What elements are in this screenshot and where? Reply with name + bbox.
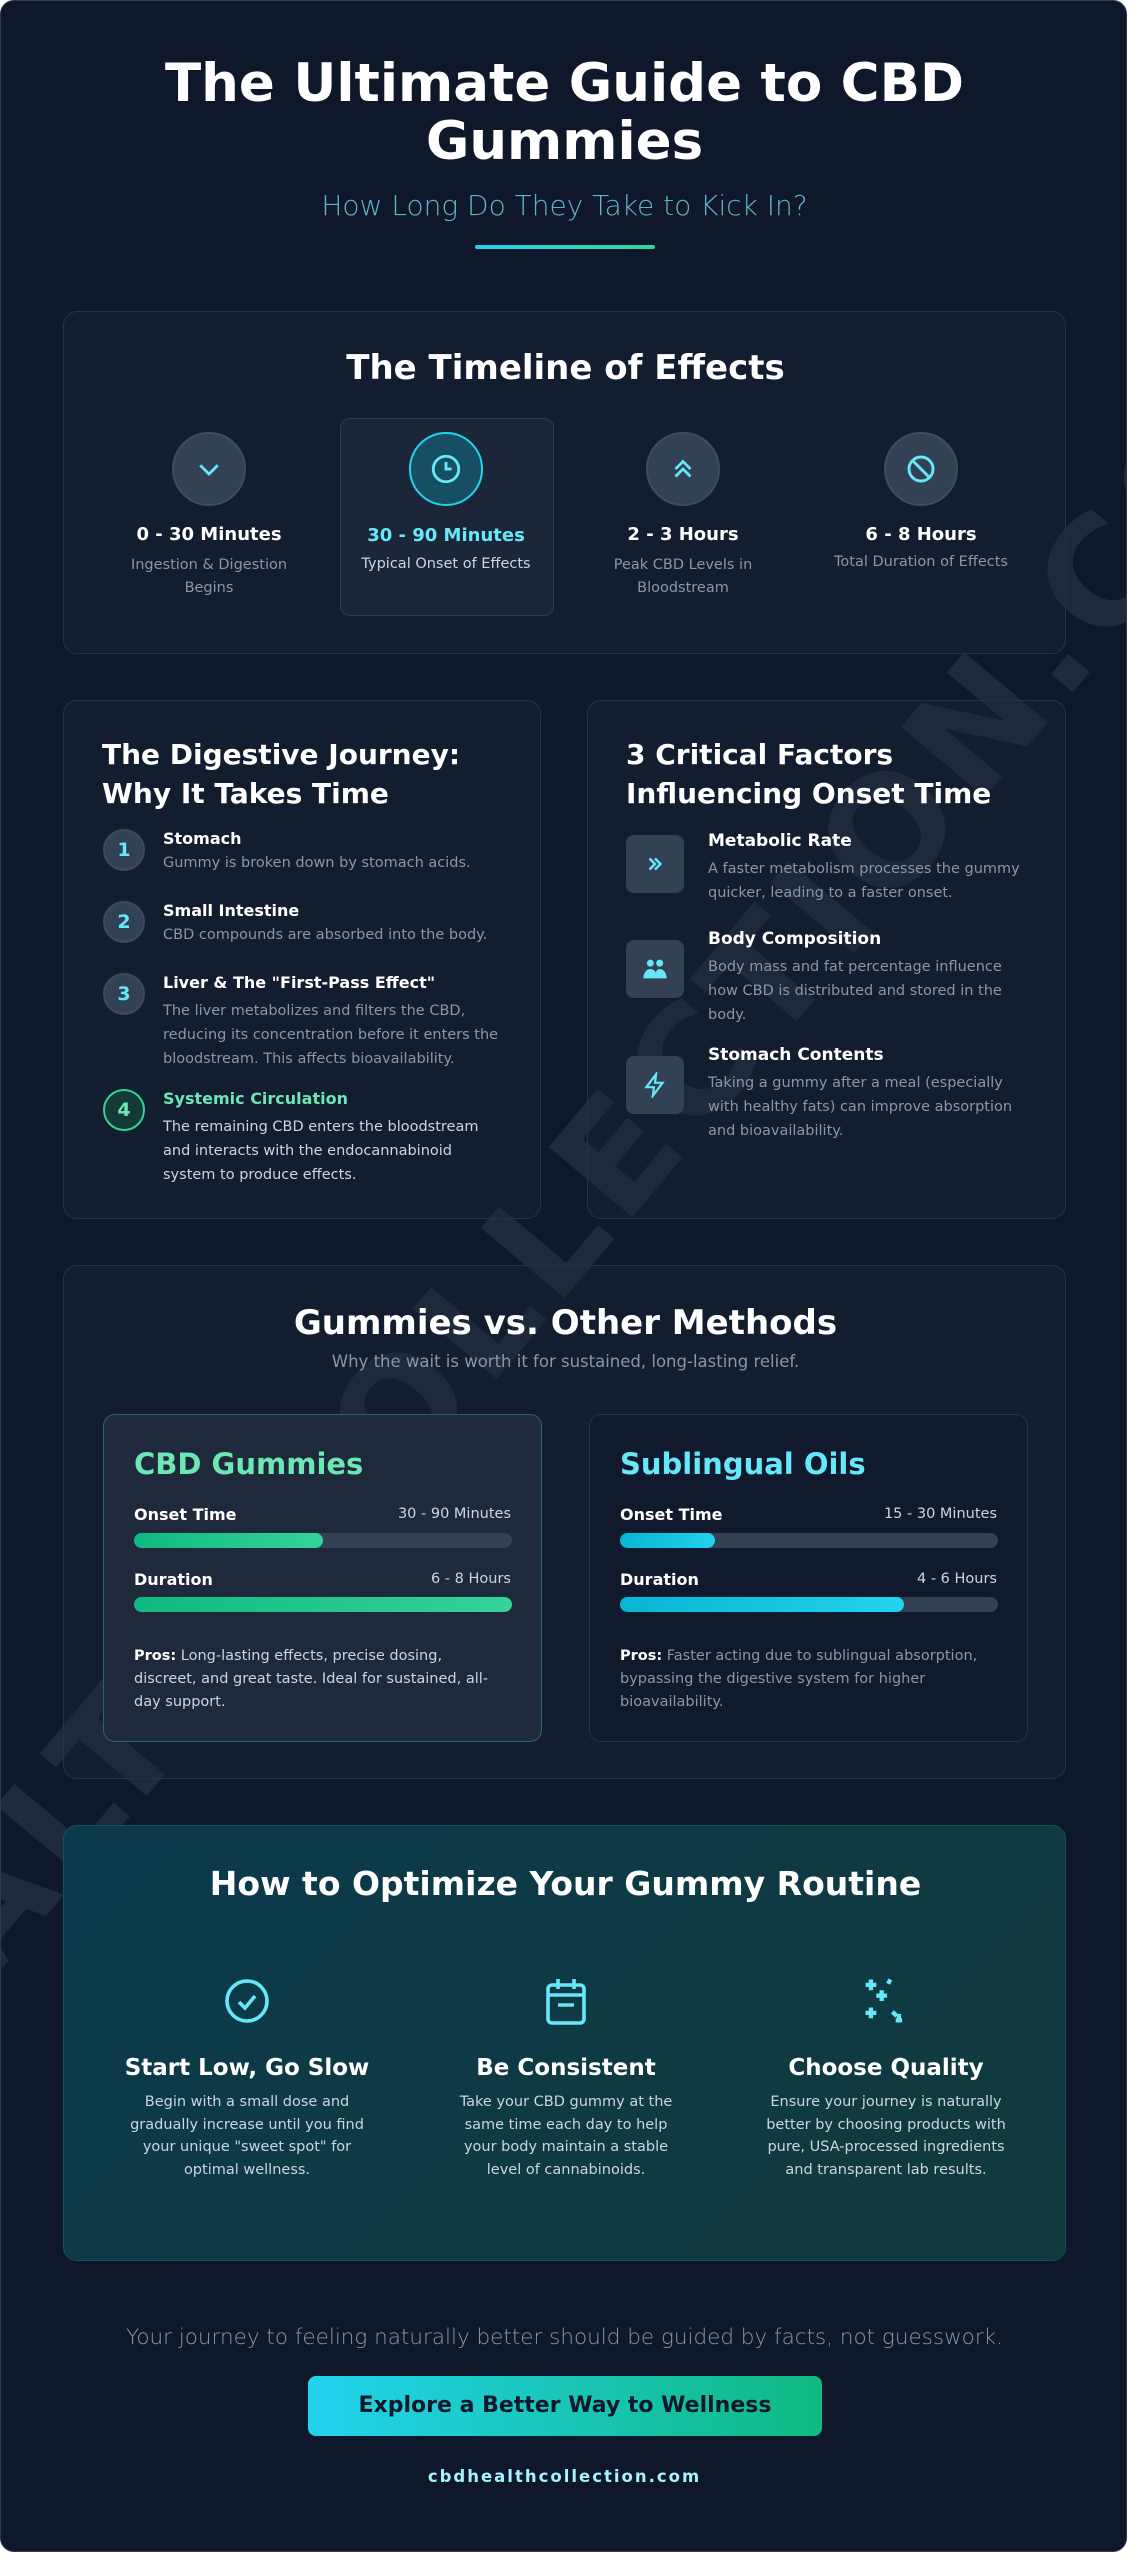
tip: start low [125, 1979, 369, 2178]
icon: chevron down [172, 432, 246, 506]
step 2: 30 - 90 Minutes [367, 525, 525, 546]
subheading: Why the wait is worth it for sustained, long-lasting relief. [332, 1352, 799, 1371]
step: small intestine: Small Intestine [163, 901, 299, 920]
card: gummies: CBD Gummies [134, 1447, 363, 1481]
step: liver: The liver metabolizes and filters the CBD, reducing its concentration before it enters the bloodstream. This affects bioavailability. [163, 1003, 498, 1067]
tip: start low: Begin with a small dose and gradually increase until you find your unique "sweet spot" for optimal wellness. [130, 2094, 364, 2178]
step: small intestine: 2 [117, 911, 131, 933]
panel: comparison [63, 1265, 1066, 1779]
step 3 [614, 432, 752, 596]
heading: 3 Critical Factors [626, 738, 893, 771]
factor: body composition [626, 929, 1002, 1023]
card: sublingual oils: Onset Time [620, 1505, 723, 1524]
panel: timeline [63, 311, 1066, 654]
panel: digestive journey [63, 700, 541, 1219]
step: liver [103, 973, 498, 1067]
title: The Ultimate Guide to CBD [165, 53, 964, 114]
closing text: Your journey to feeling naturally better should be guided by facts, not guesswork. [126, 2325, 1003, 2350]
icon: sparkles [866, 1978, 902, 2022]
step 4: Total Duration of Effects [834, 554, 1008, 570]
card: sublingual oils: Pros: Faster acting due to sublingual absorption, bypassing the digestive system for higher bioavailability. [620, 1648, 977, 1710]
icon: double up [646, 432, 720, 506]
card: gummies: Pros: Long-lasting effects, precise dosing, discreet, and great taste. Ideal for sustained, all-day support. [134, 1648, 488, 1710]
heading [626, 738, 991, 810]
card: gummies: 30 - 90 Minutes [398, 1506, 511, 1522]
title: Gummies [426, 111, 703, 172]
step: circulation [103, 1089, 478, 1183]
step: small intestine: CBD compounds are absorbed into the body. [163, 927, 487, 943]
tip: start low: Start Low, Go Slow [125, 2055, 369, 2081]
tip: be consistent: Be Consistent [476, 2055, 656, 2081]
bar: gummies duration [134, 1597, 512, 1612]
card: gummies: Duration [134, 1570, 213, 1589]
card: gummies: Onset Time [134, 1505, 237, 1524]
factor: body composition: Body mass and fat percentage influence how CBD is distributed and stored in the body. [708, 959, 1002, 1023]
bar: oils onset [620, 1533, 998, 1548]
tip: choose quality: Ensure your journey is naturally better by choosing products with pure, USA-processed ingredients and transparent lab results. [766, 2094, 1006, 2178]
heading: Gummies vs. Other Methods [294, 1303, 837, 1343]
panel: critical factors: Stomach Contents [708, 1045, 884, 1065]
step: circulation: Systemic Circulation [163, 1089, 348, 1108]
step 1: Ingestion & Digestion Begins [131, 557, 287, 596]
heading: How to Optimize Your Gummy Routine [210, 1864, 921, 1903]
factor: stomach contents [626, 1045, 1012, 1139]
heading: The Timeline of Effects [346, 348, 785, 388]
step 3: Peak CBD Levels in Bloodstream [614, 557, 752, 596]
tip: be consistent: Take your CBD gummy at the same time each day to help your body maintain a stable level of cannabinoids. [460, 2094, 672, 2178]
card: gummies [103, 1414, 542, 1742]
step: circulation: The remaining CBD enters the bloodstream and interacts with the endocannabinoid system to produce effects. [163, 1119, 478, 1183]
card: sublingual oils: 4 - 6 Hours [917, 1571, 997, 1587]
step: circulation: 4 [117, 1099, 131, 1121]
title [165, 53, 964, 172]
step: liver: 3 [117, 983, 131, 1005]
step: stomach: Gummy is broken down by stomach acids. [163, 855, 471, 871]
step 1: 0 - 30 Minutes [136, 524, 282, 545]
factor: metabolic rate [626, 831, 1020, 901]
subtitle: How Long Do They Take to Kick In? [321, 189, 808, 222]
step 4 [834, 432, 1008, 570]
tip: be consistent [460, 1979, 672, 2178]
step: stomach: 1 [117, 839, 131, 861]
website url: cbdhealthcollection.com [428, 2467, 701, 2486]
step 4: 6 - 8 Hours [865, 524, 977, 545]
card: gummies: 6 - 8 Hours [431, 1571, 511, 1587]
icon: check circle [225, 1979, 269, 2023]
card: sublingual oils: Sublingual Oils [620, 1447, 866, 1481]
panel: critical factors: Body Composition [708, 929, 881, 949]
step: liver: Liver & The "First-Pass Effect" [163, 973, 435, 992]
heading: The Digestive Journey: [102, 738, 460, 771]
panel: optimize routine [63, 1825, 1066, 2261]
step 3: 2 - 3 Hours [627, 524, 739, 545]
bar: gummies onset [134, 1533, 512, 1548]
step 2 [361, 432, 531, 572]
icon: calendar [546, 1979, 586, 2025]
heading: Why It Takes Time [102, 777, 389, 810]
CTA button: Explore a Better Way to Wellness [359, 2393, 771, 2418]
step: small intestine [103, 901, 487, 943]
factor: stomach contents: Taking a gummy after a meal (especially with healthy fats) can improve absorption and bioavailability. [708, 1075, 1012, 1139]
step: stomach: Stomach [163, 829, 242, 848]
card: sublingual oils [589, 1414, 1028, 1742]
card: sublingual oils: Duration [620, 1570, 699, 1589]
panel: critical factors [587, 700, 1066, 1219]
bar: oils duration [620, 1597, 998, 1612]
factor: metabolic rate: Metabolic Rate [708, 831, 852, 851]
icon: ban [884, 432, 958, 506]
step 1 [131, 432, 287, 596]
tip: choose quality: Choose Quality [788, 2055, 984, 2081]
heading [102, 738, 460, 810]
icon: clock [409, 432, 483, 506]
divider accent [475, 245, 655, 249]
step 2: Typical Onset of Effects [361, 556, 531, 572]
CTA button [308, 2376, 822, 2436]
card: sublingual oils: 15 - 30 Minutes [884, 1506, 997, 1522]
step: stomach [103, 829, 471, 871]
tip: choose quality [766, 1978, 1006, 2178]
highlight box [340, 418, 554, 616]
factor: metabolic rate: A faster metabolism processes the gummy quicker, leading to a faster onset. [708, 861, 1020, 901]
heading: Influencing Onset Time [626, 777, 991, 810]
